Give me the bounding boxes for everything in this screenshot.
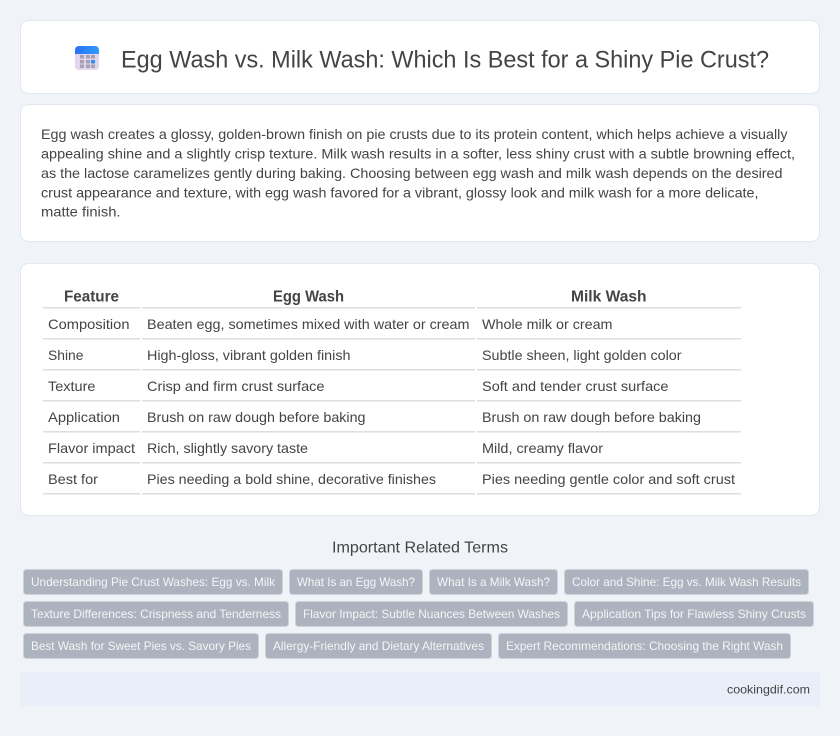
row: composition: Whole milk or cream [482,316,612,332]
icon: calendar [75,46,99,70]
row: shine: High-gloss, vibrant golden finish [147,347,350,363]
panel: summary paragraph: crust appearance and texture, with egg wash favored for a vibrant, glossy look and milk wash for a more delicate, [41,184,758,200]
panel: summary paragraph [20,104,820,242]
row: composition: Beaten egg, sometimes mixed with water or cream [147,316,470,332]
chip text: What Is an Egg Wash? [297,575,415,589]
footer source text: cookingdif.com [727,682,810,696]
row: application: Brush on raw dough before baking [482,409,701,425]
row: texture: Soft and tender crust surface [482,378,669,394]
row: application [48,409,701,425]
chip text: Application Tips for Flawless Shiny Crusts [582,607,806,621]
row: shine [48,347,682,363]
chip text: Color and Shine: Egg vs. Milk Wash Results [572,575,801,589]
chip text: Allergy-Friendly and Dietary Alternatives [273,639,484,653]
related term chips [24,570,814,658]
footer bar [20,672,820,706]
panel: comparison table [20,264,820,516]
row: texture: Crisp and firm crust surface [147,378,325,394]
row: shine: Shine [48,347,84,363]
row: flavor impact [48,440,603,456]
row: flavor impact: Rich, slightly savory taste [147,440,308,456]
chip text: What Is a Milk Wash? [437,575,550,589]
chip text: Best Wash for Sweet Pies vs. Savory Pies [31,639,251,653]
row: composition: Composition [48,316,130,332]
row: flavor impact: Mild, creamy flavor [482,440,603,456]
table header row: Milk Wash [571,289,646,306]
row: best for: Pies needing a bold shine, decorative finishes [147,471,436,487]
chip text: Flavor Impact: Subtle Nuances Between Washes [303,607,560,621]
row: application: Brush on raw dough before baking [147,409,366,425]
row: best for: Pies needing gentle color and soft crust [482,471,735,487]
row: texture: Texture [48,378,96,394]
panel: summary paragraph: as the lactose caramelizes gently during baking. Choosing between egg wash and milk wash depends on the desired [41,165,783,181]
row: application: Application [48,409,120,425]
row: best for: Best for [48,471,98,487]
row: composition [48,316,612,332]
chip text: Texture Differences: Crispness and Tenderness [31,607,281,621]
table header row [64,289,646,306]
panel: summary paragraph: appealing shine and a slightly crisp texture. Milk wash results in a softer, less shiny crust with a subtle browning effect, [41,145,795,161]
table header row: Feature [64,289,119,306]
row: texture [48,378,669,394]
row: shine: Subtle sheen, light golden color [482,347,682,363]
chip text: Understanding Pie Crust Washes: Egg vs. Milk [31,575,276,589]
chip text: Expert Recommendations: Choosing the Right Wash [506,639,783,653]
row: best for [48,471,735,487]
table header row: Egg Wash [273,289,344,306]
chip text [31,575,806,653]
panel: summary paragraph: Egg wash creates a glossy, golden-brown finish on pie crusts due to its protein content, which helps achieve a visually [41,126,788,142]
header panel [20,20,820,94]
panel: summary paragraph: matte finish. [41,204,120,220]
heading: important related terms: Important Related Terms [332,539,508,556]
title: Egg Wash vs. Milk Wash: Which Is Best for a Shiny Pie Crust? [121,46,769,73]
row: flavor impact: Flavor impact [48,440,135,456]
